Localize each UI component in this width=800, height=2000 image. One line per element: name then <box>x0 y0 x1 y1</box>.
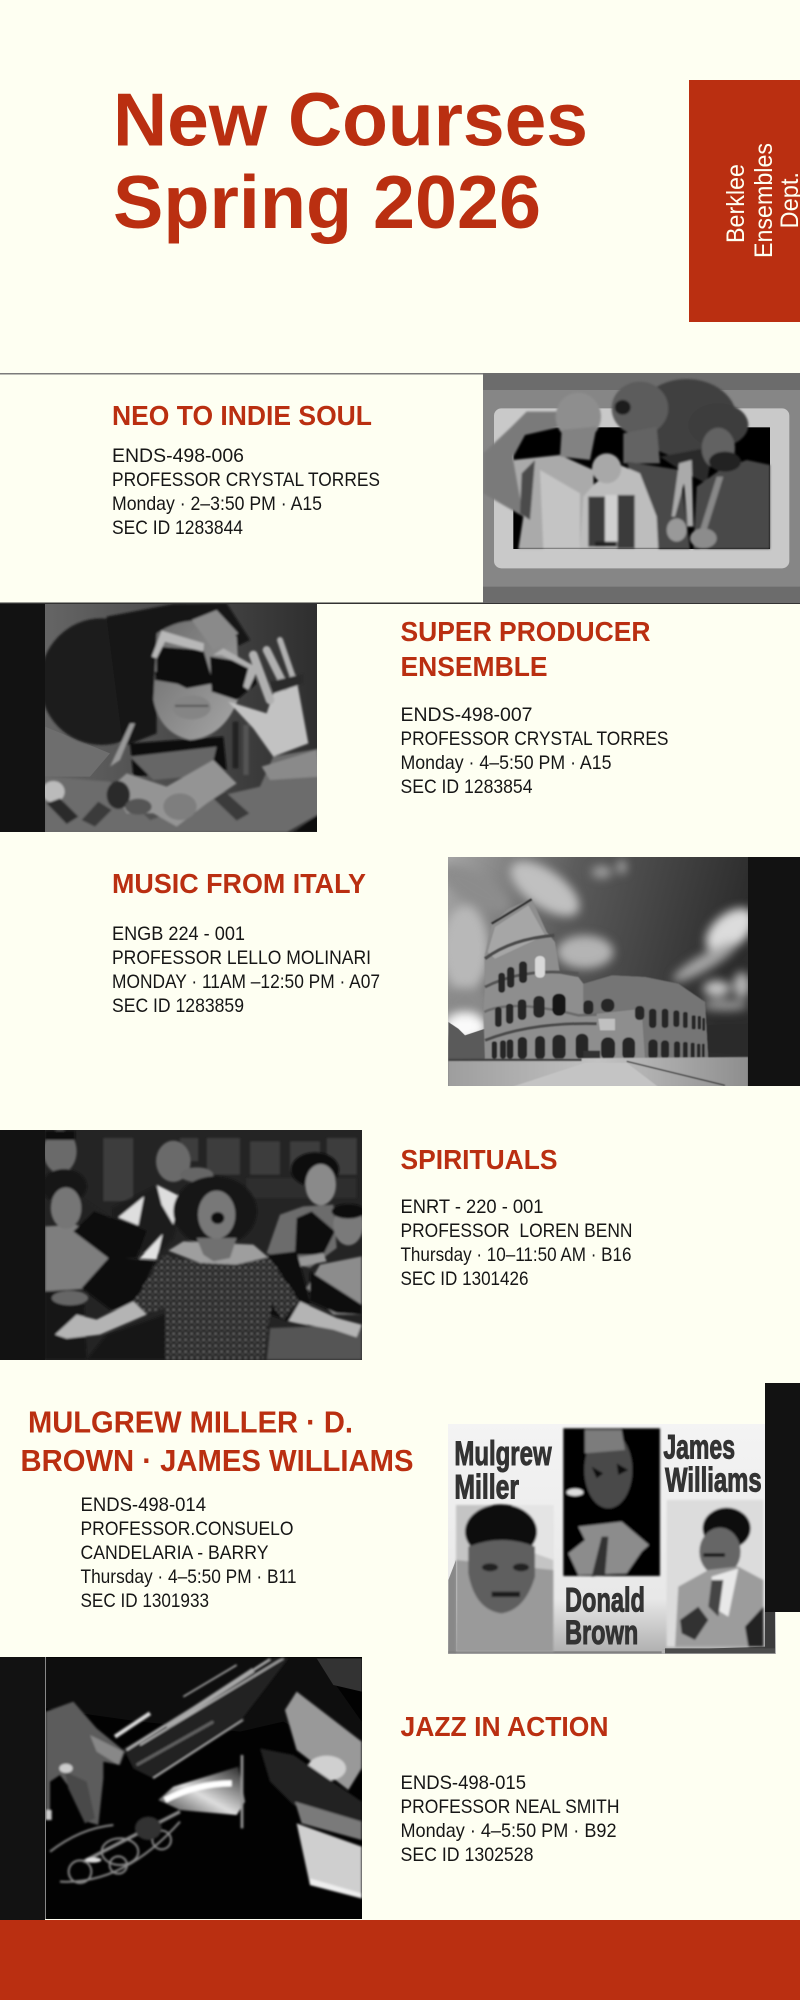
course details: MONDAY · 11AM –12:50 PM · A07 <box>112 971 380 993</box>
center portrait <box>563 1428 660 1576</box>
panel: Mulgrew Miller, D. Brown, James Williams <box>20 1383 800 1658</box>
course details: Monday · 4–5:50 PM · B92 <box>400 1820 616 1842</box>
course details <box>112 923 380 1017</box>
lips <box>184 698 210 719</box>
course details <box>400 1196 632 1290</box>
far right woman <box>307 1256 362 1315</box>
course details: SEC ID 1283854 <box>400 776 533 798</box>
heading: MULGREW MILLER · D. <box>28 1404 353 1440</box>
course details <box>80 1494 296 1612</box>
poster names: Mulgrew <box>454 1435 552 1473</box>
left man <box>483 412 562 517</box>
hand <box>46 1702 125 1825</box>
department tab: Ensembles <box>750 143 778 258</box>
course details: ENDS-498-014 <box>80 1494 206 1516</box>
sax body <box>123 1658 288 1778</box>
panel: Neo to Indie Soul <box>112 370 800 610</box>
panel: Spirituals <box>0 1128 632 1363</box>
photo: gospel choir soloist <box>40 1128 365 1363</box>
heading: JAZZ IN ACTION <box>400 1711 608 1742</box>
course details <box>400 704 668 798</box>
footer band <box>0 1920 800 2000</box>
panel: Jazz in Action <box>0 1655 620 1923</box>
poster names: Brown <box>565 1614 638 1652</box>
heading: NEO TO INDIE SOUL <box>112 400 372 431</box>
course details: Thursday · 4–5:50 PM · B11 <box>80 1566 296 1588</box>
left portrait <box>456 1505 553 1652</box>
chain necklace <box>112 760 237 827</box>
heading: BROWN · JAMES WILLIAMS <box>20 1443 414 1478</box>
right woman <box>267 1205 337 1268</box>
poster names <box>454 1428 762 1652</box>
course details <box>112 445 380 539</box>
poster names: Williams <box>665 1462 762 1500</box>
course details: Monday · 2–3:50 PM · A15 <box>112 493 322 515</box>
course details: SEC ID 1283844 <box>112 517 243 539</box>
photo: woman with oversized glasses <box>40 600 320 835</box>
cloth <box>285 1692 362 1790</box>
left woman <box>45 1225 112 1291</box>
heading <box>400 616 650 682</box>
poster names: Donald <box>565 1582 645 1620</box>
course details: PROFESSOR.CONSUELO <box>80 1518 294 1540</box>
panel: Music from Italy <box>112 851 800 1087</box>
title: New Courses <box>113 78 588 162</box>
heading: ENSEMBLE <box>400 651 548 682</box>
course details: ENGB 224 - 001 <box>112 923 245 945</box>
folders <box>73 1211 147 1258</box>
course details: ENRT - 220 - 001 <box>400 1196 544 1218</box>
photo: Colosseum <box>448 857 748 1086</box>
course details <box>400 1772 620 1866</box>
panel: Super Producer Ensemble <box>0 600 668 835</box>
black side bar <box>0 604 45 832</box>
hair <box>45 617 123 746</box>
poster names: Miller <box>454 1468 519 1506</box>
photo: saxophone and hands <box>40 1655 365 1923</box>
poster names: James <box>663 1428 735 1466</box>
course details: ENDS-498-007 <box>400 704 532 726</box>
right man <box>693 460 770 549</box>
right portrait <box>667 1500 763 1647</box>
soloist <box>173 1176 257 1246</box>
course details: PROFESSOR NEAL SMITH <box>400 1796 620 1818</box>
course details: ENDS-498-006 <box>112 445 244 467</box>
course details: CANDELARIA - BARRY <box>80 1542 268 1564</box>
title: Spring 2026 <box>113 160 541 244</box>
hand <box>228 680 308 757</box>
jacket <box>45 748 320 832</box>
earrings <box>110 723 135 767</box>
course details: PROFESSOR LELLO MOLINARI <box>112 947 371 969</box>
course details: SEC ID 1301426 <box>400 1268 528 1290</box>
black side bar <box>748 857 800 1086</box>
title <box>113 78 588 244</box>
heading: SUPER PRODUCER <box>400 616 650 647</box>
course details: Monday · 4–5:50 PM · A15 <box>400 752 612 774</box>
photo: four soul singers collage <box>480 370 800 610</box>
afro <box>656 378 735 456</box>
course details: PROFESSOR CRYSTAL TORRES <box>112 469 380 491</box>
lower bow <box>50 1812 180 1883</box>
course details: PROFESSOR LOREN BENN <box>400 1220 632 1242</box>
course details: SEC ID 1283859 <box>112 995 244 1017</box>
heading: SPIRITUALS <box>400 1144 558 1175</box>
bell <box>158 1767 245 1815</box>
glasses <box>157 647 213 688</box>
course details: SEC ID 1302528 <box>400 1844 534 1866</box>
department tab: Berklee <box>722 164 750 243</box>
woman center small <box>580 465 658 549</box>
heading <box>20 1404 414 1478</box>
course details: SEC ID 1301933 <box>80 1590 209 1612</box>
photo: three jazz pianists poster <box>445 1420 780 1658</box>
course details: ENDS-498-015 <box>400 1772 526 1794</box>
black side bar <box>765 1383 800 1612</box>
neck and face <box>130 737 227 777</box>
black side bar <box>0 1130 45 1360</box>
header: title and department tab <box>113 78 800 322</box>
course details: PROFESSOR CRYSTAL TORRES <box>400 728 668 750</box>
heading: MUSIC FROM ITALY <box>112 868 366 899</box>
department tab <box>689 80 800 322</box>
course details: Thursday · 10–11:50 AM · B16 <box>400 1244 632 1266</box>
tuxedo man <box>112 1186 182 1260</box>
sheet music <box>297 1823 362 1898</box>
black side bar <box>0 1657 45 1920</box>
